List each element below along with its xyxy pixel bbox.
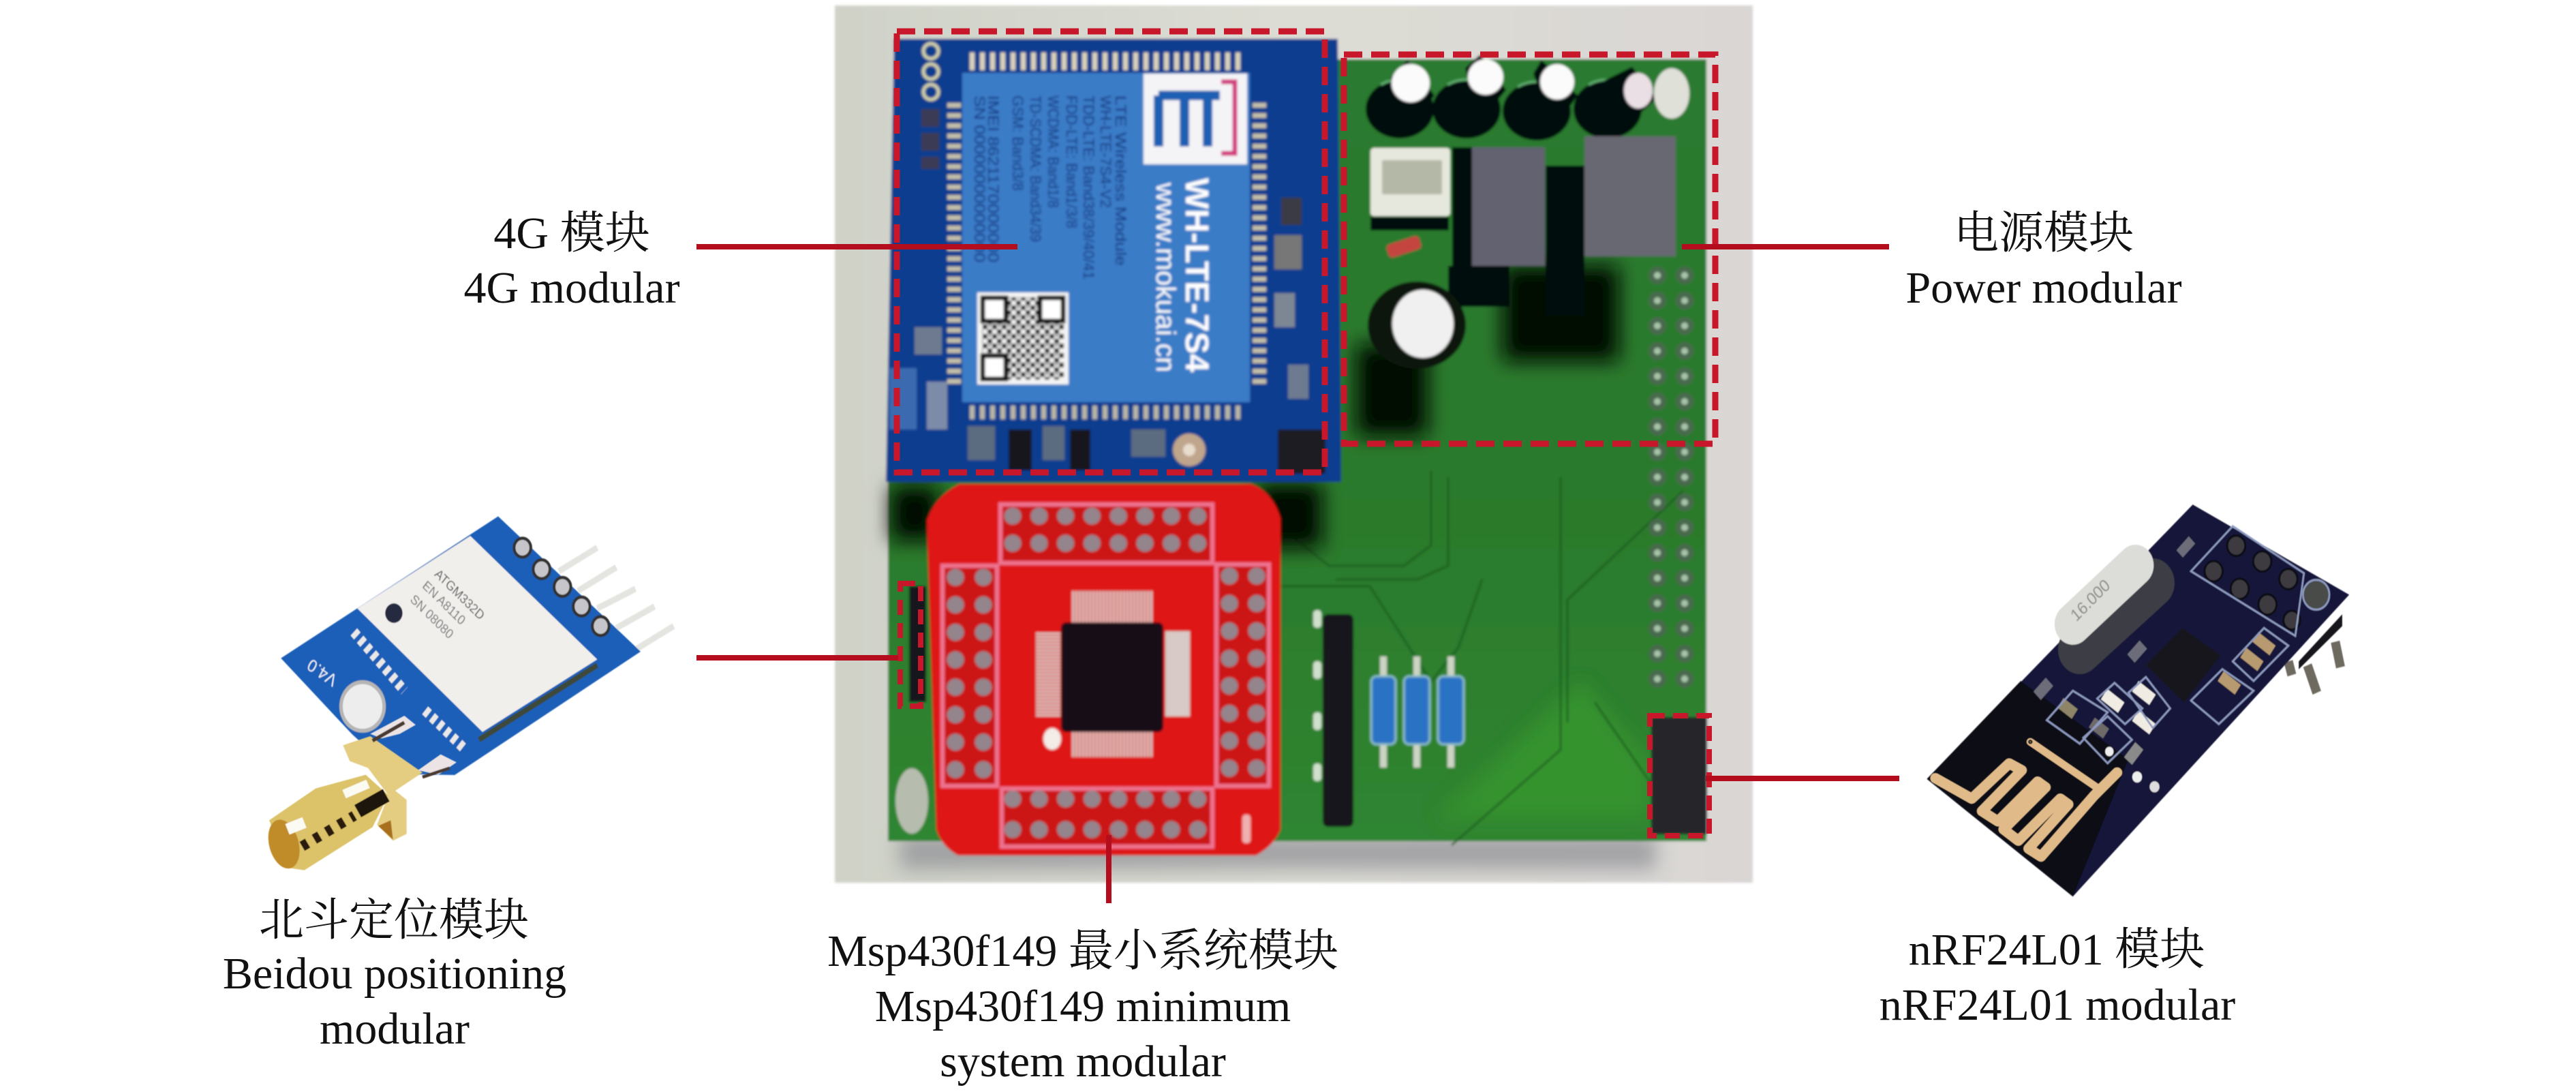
logo box	[1144, 74, 1247, 164]
module specification text: WH-LTE-7S4-V2	[1097, 95, 1114, 208]
dashed box: nRF connector	[1650, 716, 1709, 836]
MSP430 minimum system module	[927, 484, 1281, 855]
module website text: www.mokuai.cn	[1150, 182, 1180, 372]
PCB traces	[1281, 470, 1683, 845]
meander trace	[1935, 763, 2117, 857]
component shadows	[891, 266, 1619, 548]
crystal	[2068, 565, 2153, 650]
silk mark	[1242, 815, 1251, 843]
chip leads	[1048, 607, 1178, 744]
module specification text: TDD-LTE: Band38/39/40/41	[1080, 95, 1097, 279]
dark board	[1927, 504, 2349, 896]
green PCB	[888, 59, 1706, 841]
leader line: power module	[1682, 244, 1889, 249]
header holes	[923, 44, 938, 100]
nRF connector header	[1651, 717, 1707, 834]
dashed box: 4G module	[897, 31, 1325, 472]
pin header right	[1657, 275, 1685, 692]
module specification text: IMEI 8621170000000	[985, 95, 1002, 262]
RF chip	[2146, 628, 2220, 703]
photo backdrop	[835, 5, 1753, 883]
header pads	[2205, 536, 2300, 630]
solder joints	[370, 716, 416, 738]
feed stub	[2030, 742, 2097, 787]
header pads	[921, 109, 939, 169]
label: 4G module: 4G modular	[463, 263, 680, 313]
flange notch	[378, 820, 393, 840]
silk text: V4.0	[305, 654, 340, 690]
label: power module: 电源模块	[1954, 209, 2134, 258]
module specification text: LTE Wireless Module	[1112, 95, 1129, 266]
mounting hole	[341, 682, 384, 731]
dashed box: Beidou connector	[900, 583, 921, 706]
board components	[889, 198, 1325, 474]
header pins	[2288, 642, 2340, 693]
red carrier board	[927, 484, 1281, 855]
QR code	[977, 292, 1069, 384]
label: Beidou positioning module: 北斗定位模块	[259, 896, 529, 945]
module shield	[962, 73, 1250, 402]
shield bottom edge	[479, 665, 597, 740]
shield marking text	[408, 566, 487, 641]
module specification text: WCDMA: Band1/8	[1045, 95, 1062, 208]
header silk outline	[2191, 526, 2304, 636]
label: nRF24L01 module	[1880, 925, 2235, 1030]
label: nRF24L01 module: nRF24L01 模块	[1909, 925, 2205, 975]
shield marking text: EN A8110	[420, 577, 468, 628]
label: power module: Power modular	[1905, 263, 2182, 313]
large capacitor	[1368, 282, 1466, 369]
label: nRF24L01 module: nRF24L01 modular	[1880, 980, 2235, 1030]
shield marking text: ATGM332D	[432, 566, 487, 623]
stub hole	[2029, 740, 2031, 743]
black header	[2299, 614, 2342, 669]
antenna area	[1927, 681, 2128, 896]
crystal: 16.000	[2068, 575, 2114, 625]
small diode	[1385, 235, 1422, 258]
mounting hole lower left	[895, 768, 928, 834]
label: 4G module: 4G 模块	[493, 209, 650, 258]
MCU chip	[1061, 622, 1163, 732]
shield marking text: SN 08080	[408, 592, 457, 641]
leader line: Msp430f149 module	[1106, 835, 1111, 903]
nRF24L01 gold PCB antenna	[1935, 740, 2117, 857]
black header strip	[1313, 610, 1353, 827]
barrel highlights	[288, 823, 305, 830]
4G module	[886, 39, 1341, 482]
label: 4G module	[463, 209, 680, 313]
capacitors	[1366, 55, 1656, 140]
label: Msp430f149 minimum system module	[827, 926, 1338, 1087]
pin-1 marker	[1043, 728, 1061, 750]
label: Msp430f149 minimum system module: Msp430f149 minimum	[875, 982, 1291, 1031]
module specification text: FDD-LTE: Band1/3/8	[1063, 95, 1080, 228]
threaded barrel	[269, 775, 388, 870]
leader line: 4G module	[696, 244, 1017, 249]
header pads	[514, 539, 609, 635]
leader line: Beidou module	[696, 655, 898, 661]
header pins	[955, 516, 1257, 830]
label: power module	[1905, 209, 2182, 313]
flange	[343, 736, 423, 840]
module pins	[954, 61, 1259, 412]
blue board	[281, 517, 641, 775]
black gaps between parts	[1370, 147, 1584, 316]
white connector	[1370, 148, 1450, 216]
resistors	[1371, 656, 1464, 768]
barrel end	[263, 816, 305, 872]
header pins	[559, 548, 673, 650]
SMD components	[2034, 536, 2275, 792]
inductors	[1472, 147, 1545, 266]
label: Beidou positioning module: Beidou positioning	[223, 949, 566, 999]
panel: circuit board photo	[835, 5, 1753, 883]
Beidou positioning module photo	[281, 517, 673, 775]
module specification text	[971, 95, 1129, 279]
pin header outlines	[942, 504, 1269, 847]
module specification text: TD-SCDMA: Band34/39	[1027, 95, 1044, 242]
metal shield	[357, 536, 597, 732]
silk component outlines	[2046, 628, 2288, 763]
nRF24L01 module photo	[1927, 504, 2349, 896]
module specification text: SN 00000000000000	[971, 95, 988, 262]
board shadow on backdrop	[900, 835, 1656, 869]
label: Beidou positioning module	[223, 896, 566, 1054]
corner pin	[2303, 580, 2329, 609]
module specification text: GSM: Band3/8	[1009, 95, 1026, 191]
Beidou connector header	[909, 586, 926, 702]
lower right bright copper area	[1438, 682, 1649, 818]
label: Beidou positioning module: modular	[320, 1004, 470, 1054]
power module components	[1366, 55, 1689, 692]
shield dot	[385, 603, 403, 623]
label: Msp430f149 minimum system module: Msp430f149 最小系统模块	[827, 926, 1338, 976]
label: Msp430f149 minimum system module: system modular	[940, 1037, 1226, 1087]
side pads	[354, 632, 404, 691]
4G carrier board	[886, 39, 1341, 482]
module model text: WH-LTE-7S4	[1178, 178, 1214, 372]
SMA connector	[263, 716, 457, 872]
leader line: nRF24L01 module	[1706, 776, 1899, 781]
mounting hole	[1654, 68, 1689, 119]
barrel dark band	[358, 795, 386, 811]
dashed box: power module	[1344, 55, 1715, 444]
thread shadows	[302, 816, 354, 847]
